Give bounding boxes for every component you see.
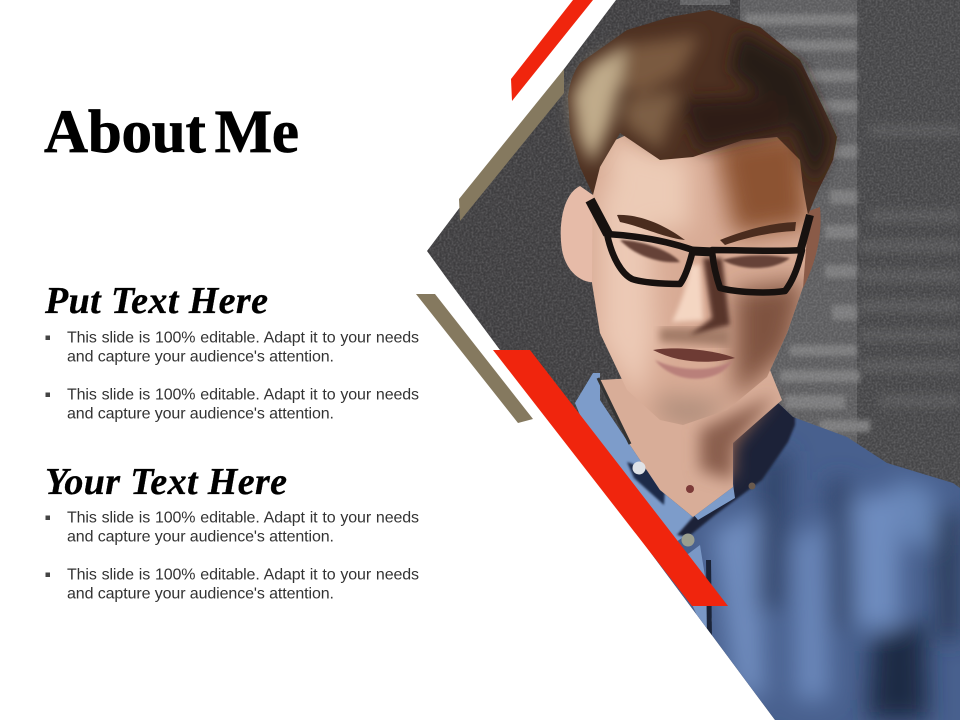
accent: red lower stripe	[493, 350, 728, 606]
text block: second section bullets: This slide is 100% editable. Adapt it to your needs	[67, 566, 419, 584]
text block: first section bullets: This slide is 100% editable. Adapt it to your needs	[67, 330, 419, 346]
title: About Me	[44, 99, 299, 166]
face	[592, 136, 809, 425]
hair	[568, 10, 837, 215]
heading: your text here: Your Text Here	[45, 461, 287, 503]
accent: tan lower stripe	[416, 294, 533, 423]
portrait photo illustration	[420, 0, 960, 720]
inner collar strip	[693, 484, 735, 520]
eyebrows	[617, 215, 796, 245]
shirt body	[570, 370, 960, 720]
backdrop: dark textured wall	[420, 0, 960, 720]
ear right	[803, 207, 821, 288]
nose highlight and shadow	[672, 265, 703, 322]
text block: first section bullets: and capture your audience's attention.	[67, 406, 334, 422]
text block: second section bullets: This slide is 100% editable. Adapt it to your needs	[67, 510, 419, 526]
neck	[598, 370, 782, 517]
shirt collar left	[575, 373, 694, 541]
shirt buttons	[632, 462, 756, 546]
text block: first section bullets: and capture your audience's attention.	[67, 348, 334, 366]
collar shadow folds	[627, 462, 665, 505]
eyes	[620, 240, 790, 268]
text block: second section bullets: and capture your audience's attention.	[67, 586, 334, 602]
text block: second section bullets: and capture your audience's attention.	[67, 528, 334, 546]
shirt placket dark	[677, 395, 795, 537]
text block: second section bullets	[46, 510, 419, 602]
text block: first section bullets: This slide is 100% editable. Adapt it to your needs	[67, 386, 419, 404]
ear left	[560, 186, 593, 282]
glasses	[590, 200, 810, 292]
mole	[686, 485, 694, 493]
text block: first section bullets	[46, 330, 419, 422]
lips	[653, 348, 735, 379]
accent: tan upper stripe	[459, 69, 564, 221]
accent: red top stripe	[511, 0, 593, 101]
heading: put text here: Put Text Here	[44, 280, 268, 322]
